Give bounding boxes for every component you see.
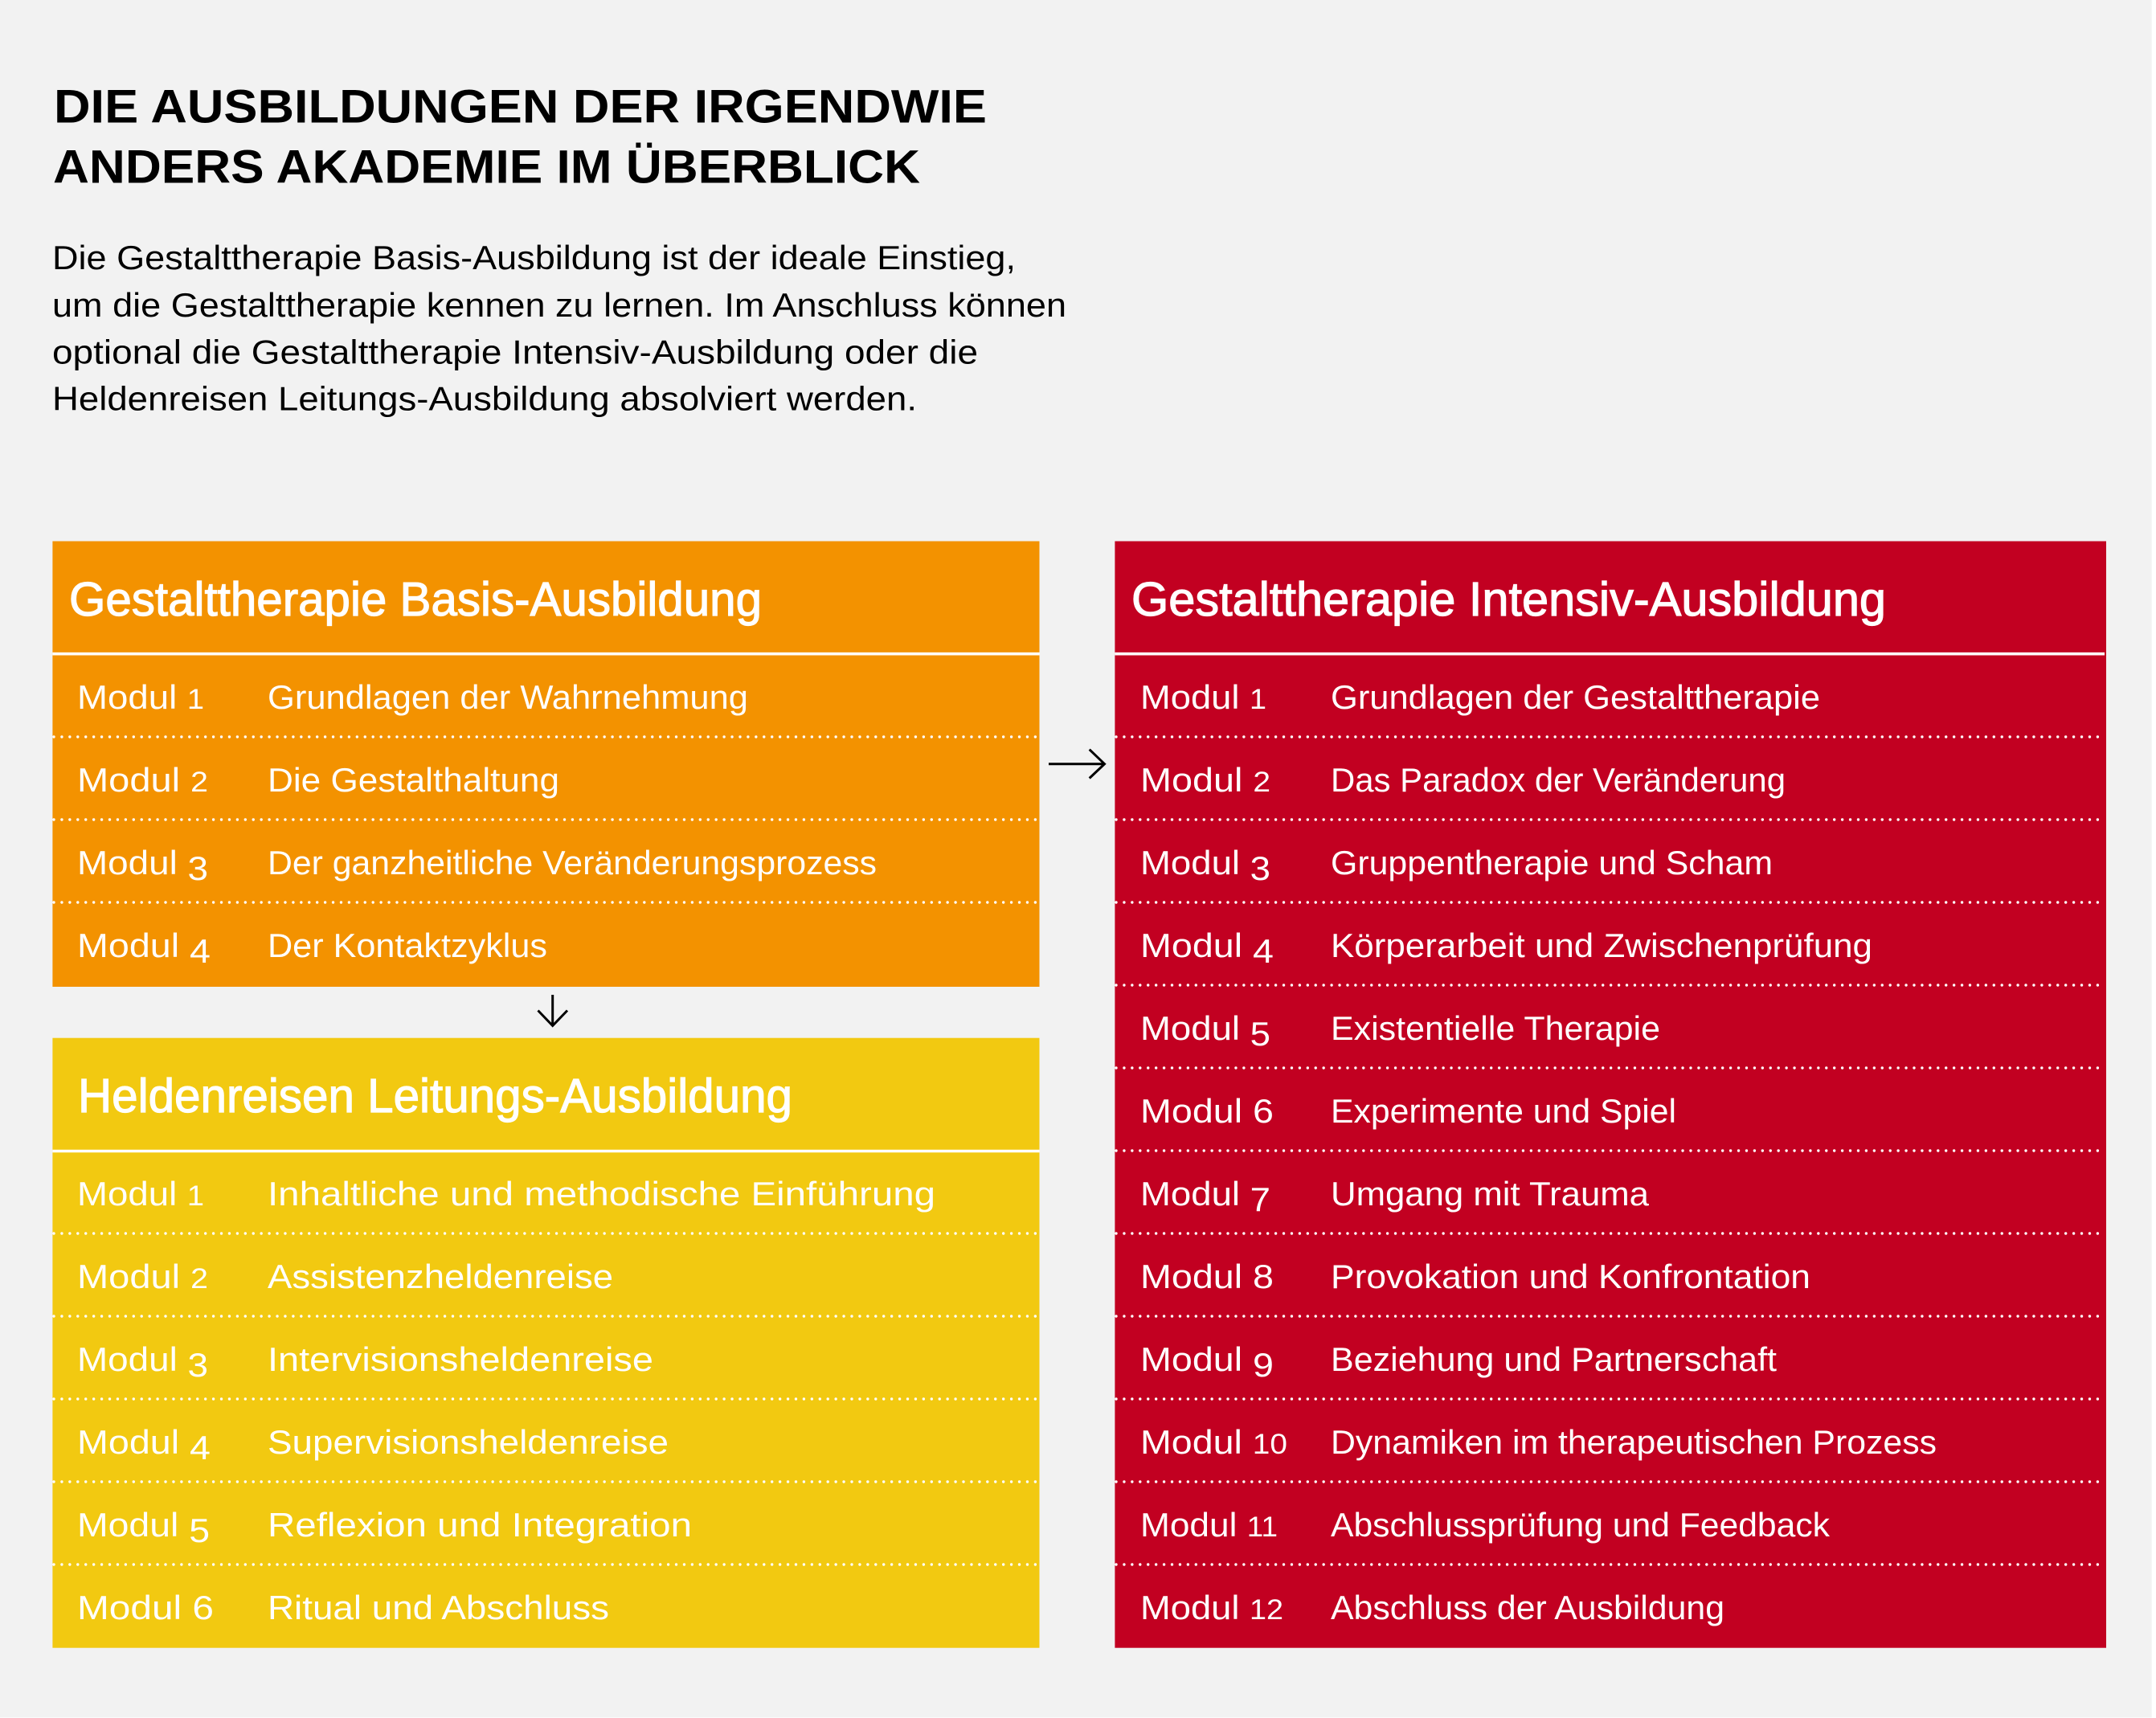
module row: Modul	[77, 844, 169, 881]
module row	[77, 1423, 669, 1466]
module row: Intervisionsheldenreise	[268, 1340, 653, 1378]
module row: 4	[190, 1429, 211, 1466]
arrow: right to Intensiv	[1049, 750, 1105, 778]
module row	[1140, 926, 1872, 970]
arrow: down to Heldenreisen	[538, 995, 567, 1025]
module row	[77, 1589, 609, 1626]
module row: Modul 8	[1140, 1258, 1274, 1295]
module row: Grundlagen der Wahrnehmung	[268, 678, 748, 716]
module row: Modul 6	[1140, 1092, 1274, 1130]
module row: Modul	[77, 1340, 169, 1378]
module row	[77, 761, 559, 799]
module row: Modul 12	[1140, 1589, 1283, 1626]
module row: Dynamiken im therapeutischen Prozess	[1331, 1423, 1937, 1461]
module row: Beziehung und Partnerschaft	[1331, 1340, 1777, 1378]
module row: 7	[1250, 1180, 1270, 1218]
module row	[1140, 1009, 1660, 1053]
module row: Die Gestalthaltung	[268, 761, 559, 799]
module row	[77, 678, 748, 716]
module row: Modul	[77, 1506, 169, 1544]
title	[53, 81, 987, 194]
module row: 3	[1250, 849, 1270, 887]
module row: Modul 10	[1140, 1423, 1287, 1461]
module row: Modul	[1140, 1175, 1232, 1213]
module row	[77, 1340, 653, 1384]
module row	[1140, 1175, 1650, 1218]
module row	[77, 1258, 613, 1295]
module row: Gruppentherapie und Scham	[1331, 844, 1773, 881]
module row: Modul 2	[77, 761, 208, 799]
module row: Grundlagen der Gestalttherapie	[1331, 678, 1820, 716]
module row: Modul 2	[1140, 761, 1270, 799]
module row: 4	[1253, 932, 1274, 970]
module row: Reflexion und Integration	[268, 1506, 692, 1544]
module row: Inhaltliche und methodische Einführung	[268, 1175, 935, 1213]
intro text block: um die Gestalttherapie kennen zu lernen. Im Anschluss können	[52, 286, 1066, 324]
panel: Gestalttherapie Intensiv-Ausbildung	[1115, 542, 2106, 1648]
module row: Modul 6	[77, 1589, 214, 1626]
module row: Ritual und Abschluss	[268, 1589, 609, 1626]
module row: Der Kontaktzyklus	[268, 926, 547, 964]
module row	[1140, 1258, 1810, 1295]
intro text block	[52, 239, 1066, 418]
panel: Heldenreisen Leitungs-Ausbildung	[52, 1038, 1039, 1648]
module row: Modul	[77, 926, 169, 964]
module row	[1140, 1340, 1777, 1384]
module row	[1140, 678, 1820, 716]
module row: Der ganzheitliche Veränderungsprozess	[268, 844, 877, 881]
panel heading: Heldenreisen: Heldenreisen Leitungs-Ausbildung	[78, 1070, 792, 1123]
module row: Modul	[1140, 1340, 1232, 1378]
module row: Umgang mit Trauma	[1331, 1175, 1650, 1213]
module row: Supervisionsheldenreise	[268, 1423, 669, 1461]
title: DIE AUSBILDUNGEN DER IRGENDWIE	[54, 81, 987, 133]
module row: Modul 2	[77, 1258, 208, 1295]
module row: Modul	[1140, 1009, 1232, 1047]
module row: Modul 11	[1140, 1506, 1278, 1544]
module row: Experimente und Spiel	[1331, 1092, 1676, 1130]
module row: 9	[1253, 1346, 1274, 1384]
module row: 5	[189, 1511, 210, 1549]
intro text block: Heldenreisen Leitungs-Ausbildung absolviert werden.	[52, 380, 917, 418]
panel heading: Basis: Gestalttherapie Basis-Ausbildung	[69, 573, 762, 626]
module row: 3	[188, 1346, 208, 1384]
intro text block: optional die Gestalttherapie Intensiv-Ausbildung oder die	[52, 333, 978, 371]
module row: Modul	[1140, 844, 1232, 881]
module row: 4	[190, 932, 211, 970]
intro text block: Die Gestalttherapie Basis-Ausbildung ist der ideale Einstieg,	[52, 239, 1016, 276]
panel: Gestalttherapie Basis-Ausbildung	[52, 542, 1039, 987]
module row: Existentielle Therapie	[1331, 1009, 1660, 1047]
module row: Das Paradox der Veränderung	[1331, 761, 1786, 799]
module row	[1140, 844, 1773, 887]
module row: 5	[1250, 1015, 1270, 1053]
module row: Modul	[1140, 926, 1232, 964]
module row: Körperarbeit und Zwischenprüfung	[1331, 926, 1872, 964]
module row	[77, 1506, 692, 1549]
module row: 3	[188, 849, 208, 887]
module row: Abschluss der Ausbildung	[1331, 1589, 1724, 1626]
module row: Modul 1	[77, 678, 204, 716]
module row: Modul 1	[77, 1175, 204, 1213]
module row	[77, 926, 547, 970]
panel heading: Intensiv: Gestalttherapie Intensiv-Ausbildung	[1131, 573, 1886, 626]
module row: Modul	[77, 1423, 169, 1461]
module row	[1140, 1092, 1676, 1130]
module row: Provokation und Konfrontation	[1331, 1258, 1810, 1295]
title: ANDERS AKADEMIE IM ÜBERBLICK	[53, 141, 920, 194]
module row: Abschlussprüfung und Feedback	[1331, 1506, 1831, 1544]
module row	[77, 844, 877, 887]
module row: Modul 1	[1140, 678, 1266, 716]
module row	[1140, 1589, 1724, 1626]
module row: Assistenzheldenreise	[268, 1258, 613, 1295]
module row	[77, 1175, 935, 1213]
